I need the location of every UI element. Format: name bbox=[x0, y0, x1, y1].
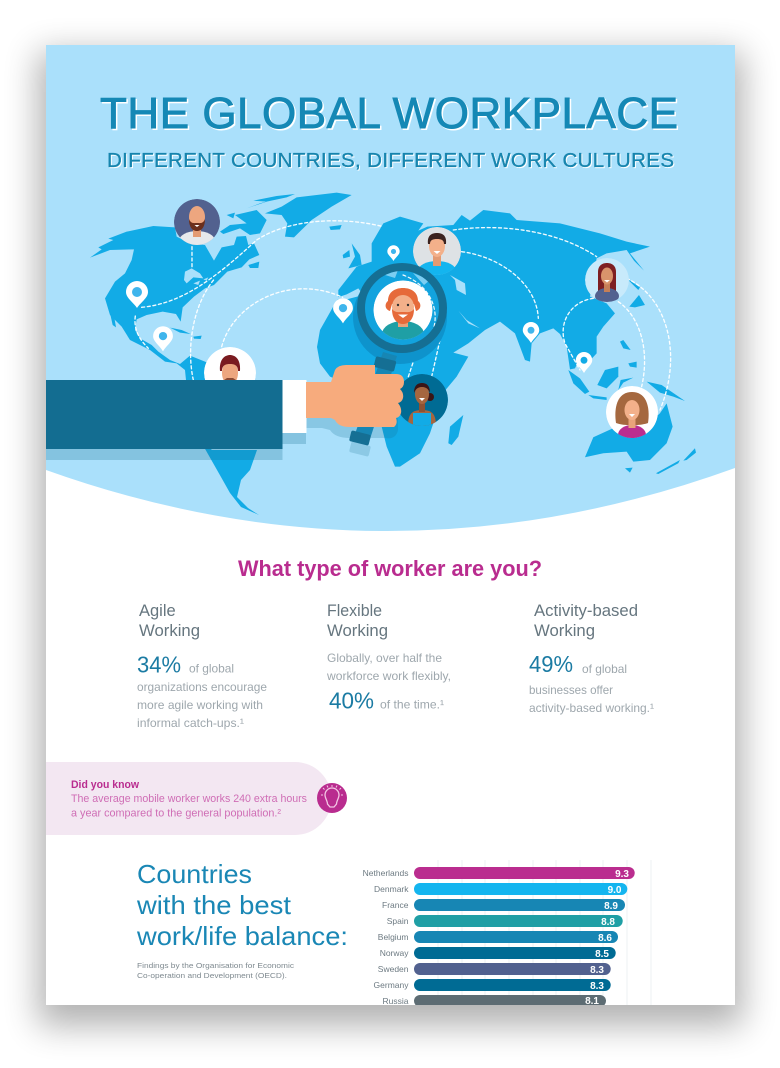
bar: Russia: Russia bbox=[383, 996, 409, 1006]
source note bbox=[137, 961, 294, 980]
bar: Belgium: Belgium bbox=[378, 932, 408, 942]
bar: Germany: 8.3 bbox=[590, 981, 604, 992]
magnifying glass bbox=[349, 267, 447, 457]
section heading: work/life balance: Countries bbox=[137, 859, 252, 889]
bar: France: 8.9 bbox=[604, 901, 618, 912]
title: THE GLOBAL WORKPLACE bbox=[102, 90, 680, 140]
icon: map pin Caribbean bbox=[153, 326, 173, 351]
avatar: red-haired man bbox=[374, 280, 432, 340]
bar: Netherlands bbox=[363, 867, 635, 880]
lens route bbox=[403, 275, 435, 330]
bar: Spain: Spain bbox=[387, 916, 409, 926]
column: flexible working: Flexible bbox=[327, 602, 382, 620]
callout: did you know bbox=[46, 762, 347, 835]
bar: Denmark: Denmark bbox=[374, 884, 409, 894]
bar: Sweden: Sweden bbox=[378, 964, 409, 974]
column: agile working: Agile bbox=[139, 602, 176, 620]
source note: Co-operation and Development (OECD). bbox=[137, 971, 287, 980]
bar: Netherlands: 9.3 bbox=[615, 869, 629, 880]
bar: Belgium bbox=[378, 931, 618, 944]
avatar: woman with curly hair bbox=[606, 386, 658, 438]
page sheet bbox=[46, 45, 735, 1005]
section heading: work/life balance: with the best bbox=[136, 890, 292, 920]
lower grip bbox=[349, 430, 371, 446]
bar: Germany: Germany bbox=[374, 980, 409, 990]
column: agile working: informal catch-ups.¹ bbox=[137, 716, 244, 730]
column: flexible working: Globally, over half the bbox=[327, 651, 442, 665]
icon: map pin Europe bbox=[387, 245, 400, 261]
column: agile working: more agile working with bbox=[137, 698, 263, 712]
bar: Spain bbox=[387, 915, 623, 928]
lens ring bbox=[361, 267, 443, 349]
column: flexible working: of the time.¹ bbox=[380, 698, 444, 712]
map: the Americas bbox=[90, 193, 352, 387]
column: agile working: organizations encourage bbox=[137, 680, 267, 694]
column: flexible working: workforce work flexibly, bbox=[326, 669, 451, 683]
column: activity-based working: activity-based working.¹ bbox=[529, 701, 654, 715]
callout: did you know: a year compared to the general population.² bbox=[71, 808, 281, 820]
world map bbox=[90, 193, 696, 515]
bar: Sweden: 8.3 bbox=[590, 965, 604, 976]
glass highlights bbox=[385, 270, 430, 285]
section heading: worker type: What type of worker are you? bbox=[238, 556, 542, 581]
avatar: man with dark red hair bbox=[204, 347, 256, 380]
title: THE GLOBAL WORKPLACE bbox=[100, 89, 678, 138]
avatar: woman in blue top bbox=[396, 374, 448, 426]
map: south america bbox=[200, 440, 259, 515]
icon: map pin India bbox=[523, 322, 539, 343]
avatar: man in blue bbox=[413, 227, 461, 275]
bar: Netherlands: Netherlands bbox=[363, 868, 408, 878]
bar: Russia bbox=[383, 995, 606, 1005]
icon: map pin west Africa bbox=[333, 298, 353, 323]
dashed connection routes bbox=[135, 221, 671, 410]
avatar: bald man bbox=[174, 199, 220, 245]
handle ghost bbox=[349, 441, 371, 457]
sleeve shadow bbox=[46, 433, 306, 460]
shirt cuff bbox=[282, 380, 306, 433]
column: activity-based working bbox=[529, 602, 654, 715]
section heading: work/life balance bbox=[136, 859, 348, 951]
column: agile working: 34% bbox=[137, 652, 181, 678]
icon: light bulb bbox=[317, 783, 347, 813]
subtitle: DIFFERENT COUNTRIES, DIFFERENT WORK CULTURES bbox=[107, 149, 674, 172]
hand shadow bbox=[306, 418, 398, 438]
bar: France: France bbox=[382, 900, 409, 910]
bar: Sweden bbox=[378, 963, 611, 976]
subtitle: DIFFERENT COUNTRIES, DIFFERENT WORK CULTURES bbox=[108, 150, 675, 173]
map: Eurasia and Africa bbox=[317, 210, 696, 474]
column: agile working bbox=[137, 602, 267, 730]
bar: France bbox=[382, 899, 625, 912]
hero background bbox=[46, 45, 735, 531]
upper grip bbox=[373, 356, 397, 372]
bar: Belgium: 8.6 bbox=[598, 933, 612, 944]
column: activity-based working: businesses offer bbox=[529, 683, 613, 697]
hand holding the magnifier bbox=[306, 365, 404, 427]
column: activity-based working: of global bbox=[582, 662, 627, 676]
lens drop shadow bbox=[353, 270, 447, 364]
column: agile working: of global bbox=[189, 662, 234, 676]
column: flexible working: 40% bbox=[329, 688, 374, 714]
bar: Denmark bbox=[374, 883, 627, 896]
bar: Germany bbox=[374, 979, 611, 992]
source note: Findings by the Organisation for Economic bbox=[137, 961, 294, 970]
bar: Denmark: 9.0 bbox=[608, 885, 622, 896]
column: activity-based working: Activity-based bbox=[534, 602, 638, 620]
bar: Spain: 8.8 bbox=[601, 917, 615, 928]
lens glass bbox=[361, 267, 443, 349]
icon: map pin USA bbox=[126, 281, 148, 308]
sleeve bbox=[46, 380, 282, 449]
callout: did you know: The average mobile worker works 240 extra hours bbox=[71, 793, 307, 805]
bar chart: work/life balance by country bbox=[363, 860, 651, 1007]
handle bbox=[354, 352, 397, 442]
section heading: work/life balance: work/life balance: bbox=[136, 921, 348, 951]
bar: Norway: Norway bbox=[380, 948, 409, 958]
column: flexible working: Working bbox=[327, 622, 388, 640]
column: flexible working bbox=[326, 602, 451, 714]
column: activity-based working: Working bbox=[534, 622, 595, 640]
avatar: woman with dark hair bbox=[585, 258, 629, 304]
column: activity-based working: 49% bbox=[529, 651, 573, 677]
icon: map pin south-east Asia bbox=[576, 352, 592, 373]
bar: Norway bbox=[380, 947, 616, 960]
column: agile working: Working bbox=[139, 622, 200, 640]
bar: Norway: 8.5 bbox=[595, 949, 609, 960]
callout: did you know: Did you know bbox=[71, 779, 139, 791]
bar: Russia: 8.1 bbox=[585, 996, 599, 1007]
